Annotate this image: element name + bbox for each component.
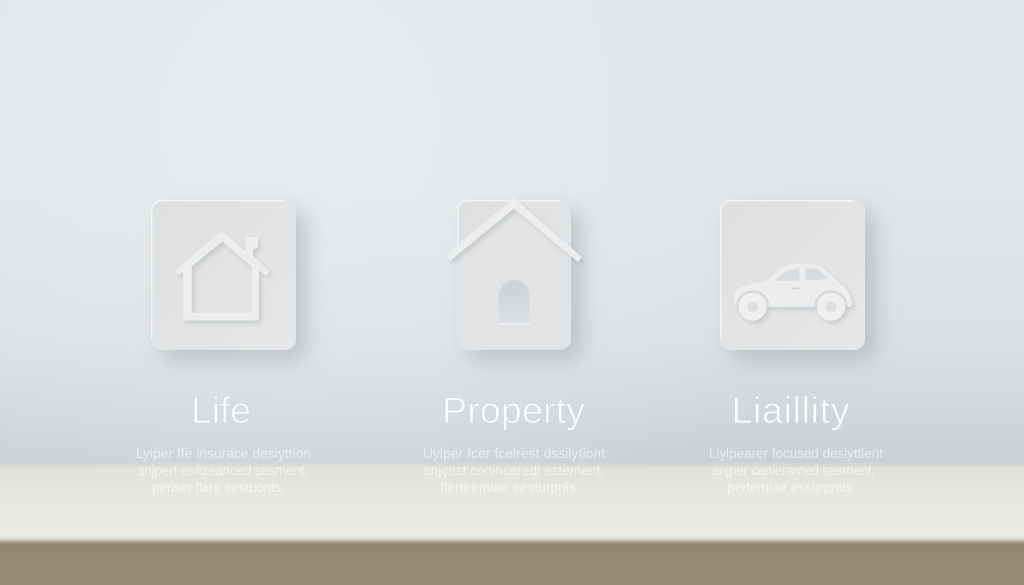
- heading: life: Life: [191, 389, 251, 431]
- roof: [446, 198, 582, 262]
- icon: house-shaped card with roof and door: [446, 198, 582, 350]
- description: liability: anjper canieramed sesment,: [712, 463, 875, 478]
- icon: house outline with chimney: [175, 231, 270, 320]
- panel: life: [136, 200, 311, 495]
- description: life: anjpert enfizeanced sesment,: [137, 463, 308, 478]
- shelf surface: [0, 465, 1024, 545]
- description: property: anjçest conincaredi estement,: [423, 463, 604, 478]
- description: property: Uylper fcer fcelrest dssilytiont: [423, 446, 605, 461]
- description: liability: Liylpearer focused deslyttient: [709, 446, 883, 461]
- front wheel: [736, 290, 769, 321]
- description: property: fierteemiae eesturpnis.: [440, 480, 580, 495]
- description: liability: pertemiae essurpnits.: [727, 480, 856, 495]
- description: life: periser flare eestuonts.: [152, 480, 285, 495]
- icon: car: [734, 263, 852, 321]
- heading: liability: Liaillity: [732, 389, 850, 431]
- description: life: Lyiper ffe insurace desiyttion: [136, 446, 311, 461]
- description: property: [423, 446, 605, 495]
- heading: property: Property: [442, 389, 585, 431]
- icon card: liability: [720, 200, 865, 350]
- door: [498, 280, 530, 324]
- rear wheel: [814, 290, 848, 321]
- panel: liability: [709, 200, 883, 495]
- wooden shelf edge: [0, 541, 1024, 585]
- description: life: [136, 446, 311, 495]
- icon card: life: [151, 200, 296, 350]
- panel: property: [423, 198, 605, 495]
- description: liability: [709, 446, 883, 495]
